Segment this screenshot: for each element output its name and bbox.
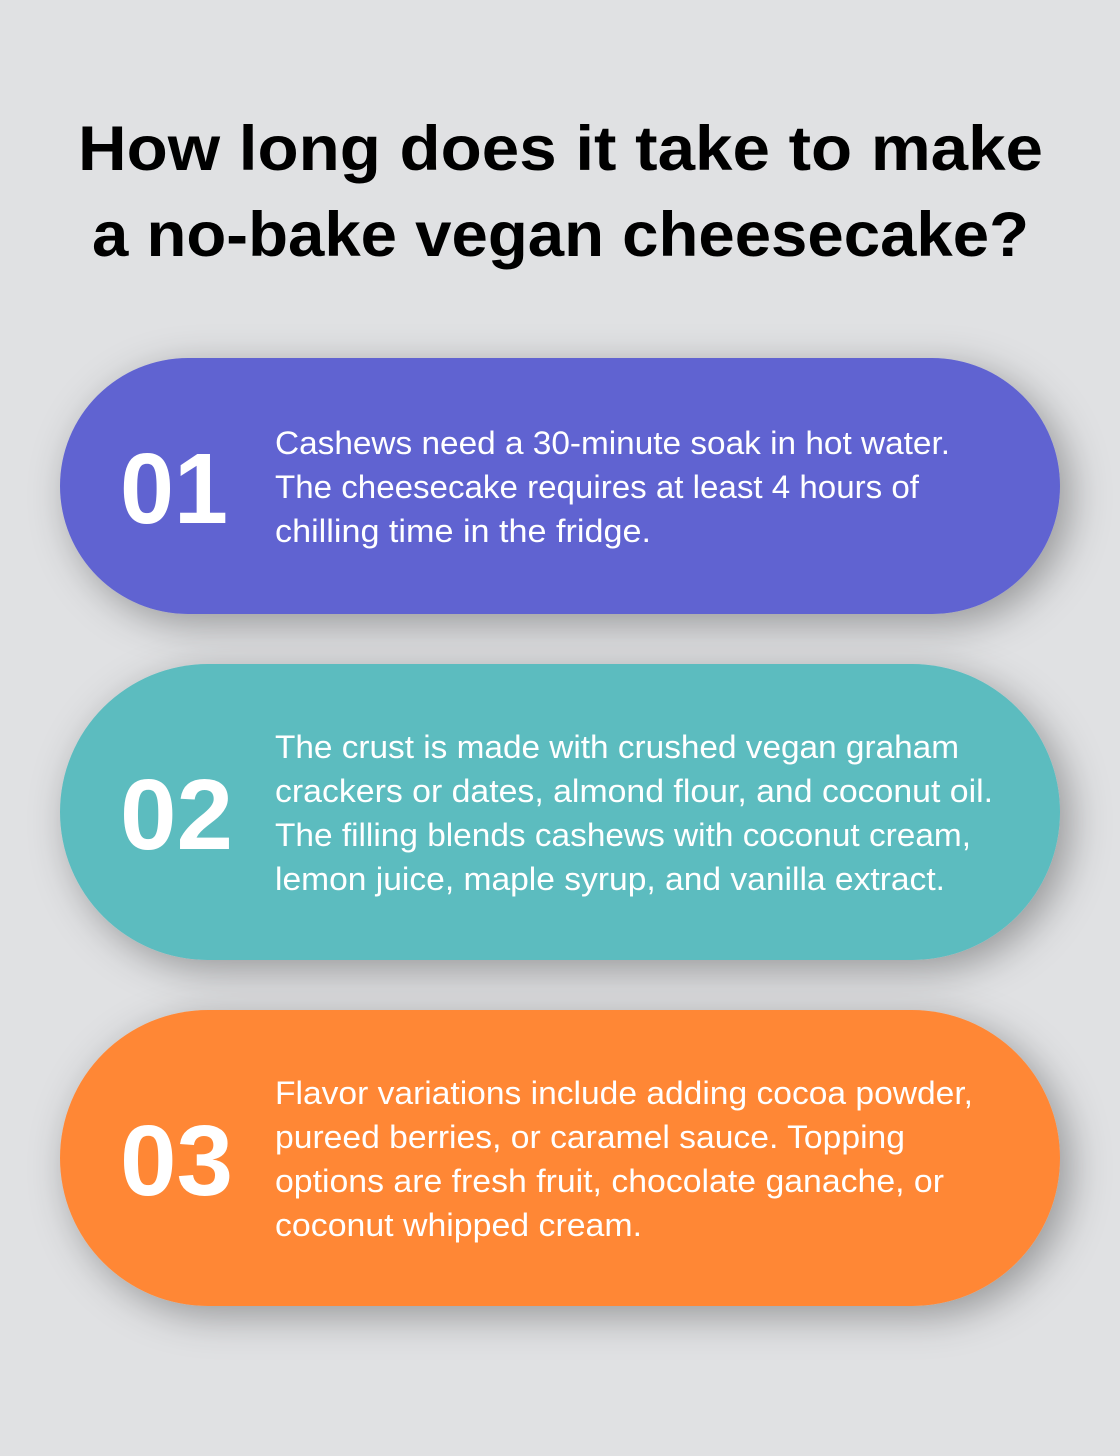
title: a no-bake vegan cheesecake? bbox=[92, 200, 1029, 270]
panel: step 01 bbox=[60, 358, 1060, 614]
panel: step 02 bbox=[60, 664, 1060, 960]
number 02: 02 bbox=[120, 759, 233, 871]
step 01 text: The cheesecake requires at least 4 hours of bbox=[275, 469, 920, 505]
step 02 text: crackers or dates, almond flour, and coconut oil. bbox=[275, 773, 993, 809]
step 02 text: The filling blends cashews with coconut cream, bbox=[275, 817, 971, 853]
step 03 text: pureed berries, or caramel sauce. Topping bbox=[275, 1119, 905, 1155]
number 03: 03 bbox=[120, 1105, 233, 1217]
step 03 text: coconut whipped cream. bbox=[275, 1207, 642, 1243]
step 01 text bbox=[275, 425, 950, 549]
step 03 text: options are fresh fruit, chocolate ganache, or bbox=[275, 1163, 944, 1199]
panel: step 03 bbox=[60, 1010, 1060, 1306]
title: How long does it take to make bbox=[78, 114, 1043, 184]
step 01 text: chilling time in the fridge. bbox=[275, 513, 651, 549]
step 01 text: Cashews need a 30-minute soak in hot water. bbox=[275, 425, 950, 461]
title bbox=[78, 114, 1043, 270]
number 01: 01 bbox=[120, 433, 228, 545]
step 02 text: lemon juice, maple syrup, and vanilla extract. bbox=[275, 861, 945, 897]
step 03 text: Flavor variations include adding cocoa powder, bbox=[275, 1075, 973, 1111]
step 03 text bbox=[275, 1075, 973, 1243]
step 02 text bbox=[275, 729, 993, 897]
step 02 text: The crust is made with crushed vegan graham bbox=[275, 729, 959, 765]
